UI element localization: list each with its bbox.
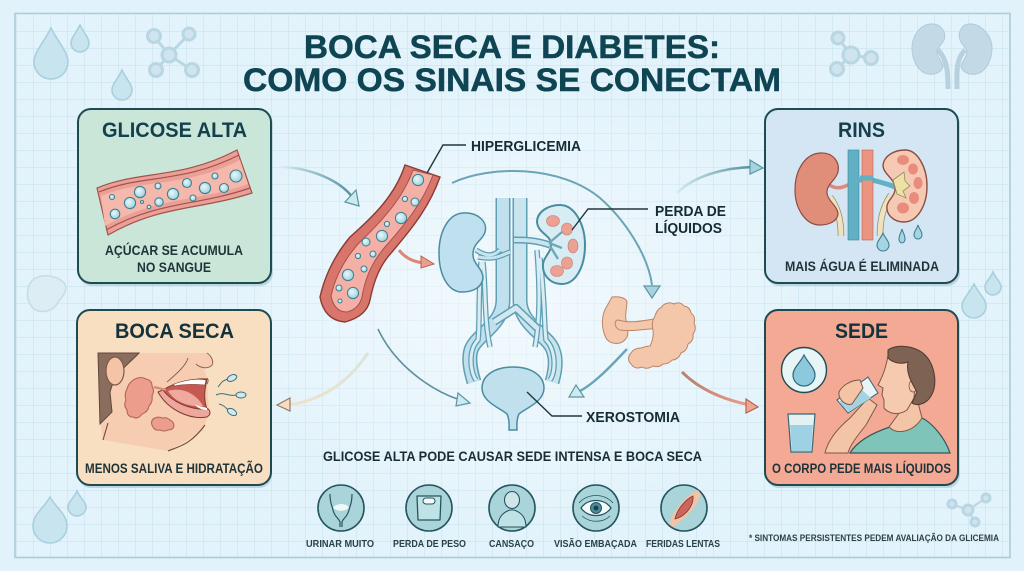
caption: açúcar se acumula: AÇÚCAR SE ACUMULA [105,243,243,258]
symptom: visão embaçada [554,485,637,550]
icon: glass of water [788,414,815,452]
organ: pancreas [602,297,695,368]
heading: sede: SEDE [835,320,888,343]
arrow: to rins [677,160,763,193]
callout: perda de líquidos: LÍQUIDOS [655,220,722,237]
symptom: feridas lentas [646,485,720,550]
symptom: urinar muito [306,485,374,550]
heading: boca seca: BOCA SECA [115,320,234,343]
caption: mais água é eliminada: MAIS ÁGUA É ELIMINADA [785,259,939,274]
callout: xerostomia [527,392,681,426]
arrow: pancreas to sede [682,372,758,413]
organ: ureters and great vessels [470,198,555,382]
heading: glicose alta: GLICOSE ALTA [102,119,247,142]
symptom: visão embaçada: VISÃO EMBAÇADA [554,537,637,550]
icon: dry air droplets [216,373,246,417]
symptom: urinar muito: URINAR MUITO [306,538,374,550]
callout: perda de líquidos: PERDA DE [655,204,726,220]
organ: left kidney [439,213,486,292]
symptom: perda de peso: PERDA DE PESO [393,538,466,550]
panel: boca seca [77,310,272,488]
title: COMO OS SINAIS SE CONECTAM [243,62,781,98]
heading: rins: RINS [838,119,885,142]
icon: water drop circle [782,348,826,392]
illustration: kidneys with water drops [795,150,927,251]
callout: xerostomia: XEROSTOMIA [586,410,681,426]
caption: açúcar se acumula: NO SANGUE [137,260,211,275]
illustration: blood vessel with glucose [97,150,252,235]
summary sentence: GLICOSE ALTA PODE CAUSAR SEDE INTENSA E BOCA SECA [323,448,702,464]
arrow: arc to pancreas [452,171,660,298]
caption: açúcar se acumula [105,243,243,275]
arrow: vessel to bladder [378,329,470,406]
diagram: central organs [320,165,695,430]
callout: perda de líquidos [572,204,726,237]
caption: o corpo pede mais líquidos: O CORPO PEDE MAIS LÍQUIDOS [772,461,951,476]
symptom: perda de peso [393,485,466,550]
panel: sede [765,310,960,488]
illustration: open dry mouth profile [98,353,246,451]
title [243,29,781,98]
organ: blood vessel with glucose [320,165,440,322]
organ: bladder [482,367,544,430]
arrow: pancreas to bladder [569,349,627,397]
arrow: to boca seca [277,353,368,411]
caption: menos saliva e hidratação: MENOS SALIVA E HIDRATAÇÃO [85,461,263,476]
callout: hiperglicemia: HIPERGLICEMIA [471,139,582,155]
arrow: vessel to kidney [399,250,434,268]
organ: right kidney section [537,205,585,284]
panel: glicose alta [78,109,273,286]
symptom: feridas lentas: FERIDAS LENTAS [646,538,720,550]
symptom: cansaço [489,485,535,550]
arrow: glicose to vessel [282,167,359,206]
illustration: man drinking [825,346,950,453]
callout: hiperglicemia [427,139,582,173]
title: BOCA SECA E DIABETES: [304,29,720,65]
panel: rins [765,109,960,286]
symptom: cansaço: CANSAÇO [489,538,534,550]
